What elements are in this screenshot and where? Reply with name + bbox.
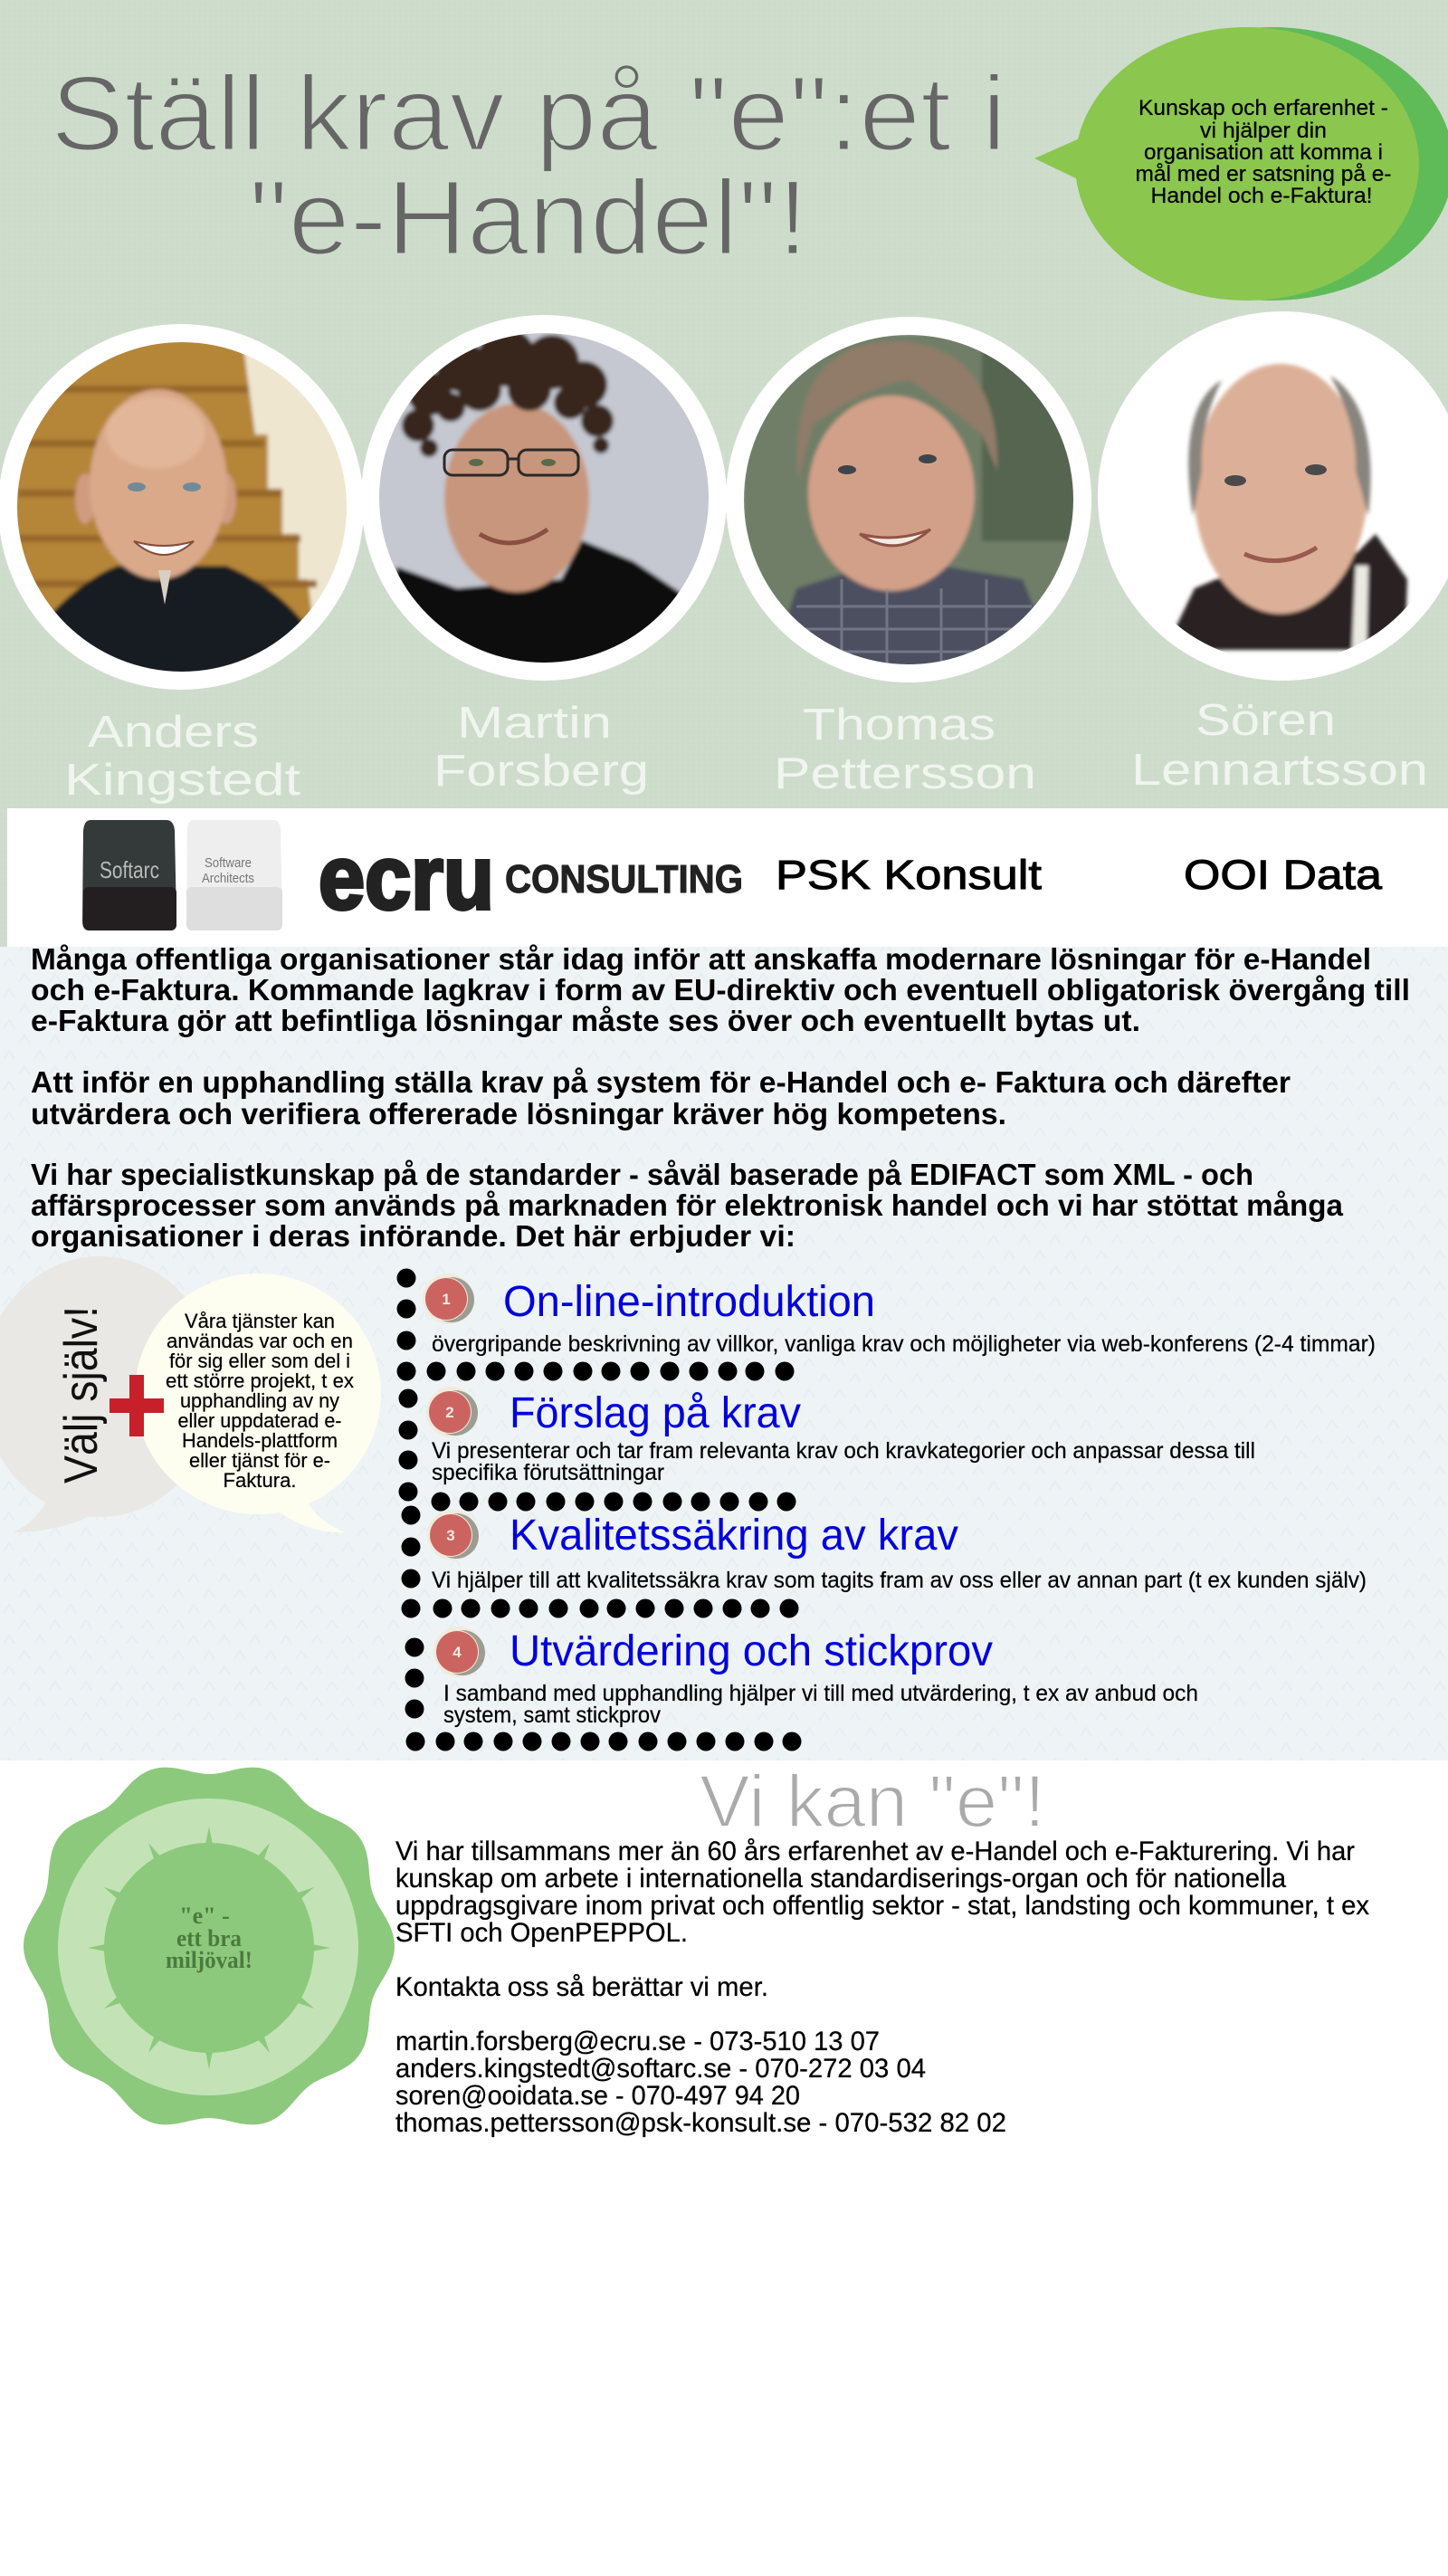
name labels: Thomas	[803, 701, 996, 749]
name labels: Martin	[457, 699, 612, 748]
intro text block: e-Faktura gör att befintliga lösningar måste ses över och eventuellt bytas ut.	[31, 1004, 1140, 1037]
name labels	[64, 696, 1428, 805]
portrait: Anders Kingstedt	[0, 324, 364, 690]
number badge 3: 3	[446, 1527, 455, 1544]
contact list: soren@ooidata.se - 070-497 94 20	[395, 2081, 800, 2111]
speech bubbles: Välj själv	[0, 1256, 381, 1532]
dotted connector lines	[396, 1269, 802, 1751]
heading: Vi kan "e"!: Vi kan "e"!	[700, 1760, 1045, 1843]
contact list: anders.kingstedt@softarc.se - 070-272 03 04	[395, 2054, 926, 2084]
number badge 2: 2	[445, 1404, 454, 1421]
service 1: On-line-introduktion: övergripande beskrivning av villkor, vanliga krav och möjligheter via web-konferens (2-4 timmar)	[432, 1331, 1376, 1357]
logo: OOI Data: OOI Data	[1184, 852, 1383, 898]
bubble text: Handels-plattform	[182, 1429, 338, 1452]
background: pale body section	[0, 947, 1448, 1760]
intro text block	[31, 942, 1410, 1253]
badge text: ett bra	[176, 1925, 242, 1951]
number badge 3	[427, 1510, 479, 1560]
service 4: Utvärdering och stickprov: I samband med upphandling hjälper vi till med utvärdering, t ex av anbud och	[443, 1681, 1198, 1706]
contact list: thomas.pettersson@psk-konsult.se - 070-532 82 02	[395, 2108, 1006, 2138]
number badge 2	[426, 1387, 478, 1437]
intro text block: Många offentliga organisationer står idag inför att anskaffa modernare lösningar för e-Handel	[31, 942, 1371, 976]
text block: experience	[395, 1837, 1369, 2002]
service 3: Kvalitetssäkring av krav: Vi hjälper till att kvalitetssäkra krav som tagits fram av oss eller av annan part (t ex kunden själv)	[432, 1568, 1367, 1593]
intro text block: utvärdera och verifiera offererade lösningar kräver hög kompetens.	[31, 1097, 1006, 1131]
bubble text: Våra tjänster kan	[185, 1310, 335, 1332]
text block: experience: SFTI och OpenPEPPOL.	[395, 1918, 688, 1948]
bubble text: Faktura.	[223, 1469, 297, 1492]
badge text: miljöval!	[166, 1947, 252, 1973]
badge text: "e" -	[179, 1903, 230, 1929]
title: Ställ krav på "e":et i	[51, 54, 1006, 174]
service 2: Förslag på krav: Förslag på krav	[510, 1389, 801, 1437]
background: sage header	[0, 0, 1448, 947]
vertical heading: Välj själv!	[55, 1306, 108, 1484]
intro text block: Att inför en upphandling ställa krav på system för e-Handel och e- Faktura och därefter	[31, 1065, 1291, 1099]
logo: Softarc keys	[82, 820, 282, 930]
speech bubble: intro callout: mål med er satsning på e-	[1135, 162, 1392, 186]
service 2: Förslag på krav: Vi presenterar och tar fram relevanta krav och kravkategorier och anpassar dessa till	[432, 1438, 1255, 1464]
badge text	[166, 1903, 252, 1973]
logo: ecru consulting	[319, 827, 743, 929]
service 4: Utvärdering och stickprov	[433, 1627, 1198, 1728]
speech bubble: intro callout: vi hjälper din	[1200, 119, 1327, 143]
bubble text	[166, 1310, 354, 1492]
portrait: Thomas Pettersson	[726, 317, 1091, 682]
logo: PSK Konsult: PSK Konsult	[776, 852, 1043, 898]
name labels: Anders	[88, 708, 259, 757]
contact list	[395, 2027, 1006, 2138]
bubble text: ett större projekt, t ex	[166, 1369, 354, 1392]
service 2: Förslag på krav	[426, 1387, 1255, 1485]
bubble text: användas var och en	[167, 1330, 353, 1352]
intro text block: affärsprocesser som används på marknaden för elektronisk handel och vi har stöttat många	[31, 1188, 1344, 1222]
logo: Softarc keys: Software	[205, 855, 252, 871]
service 4: Utvärdering och stickprov: Utvärdering och stickprov	[510, 1627, 993, 1675]
number badge 4: 4	[452, 1644, 462, 1661]
bubble text: eller tjänst för e-	[189, 1449, 330, 1472]
logo: ecru consulting: CONSULTING	[505, 857, 743, 902]
logo: Softarc keys: Softarc	[100, 856, 159, 883]
intro text block: organisationer i deras införande. Det här erbjuder vi:	[31, 1219, 795, 1253]
service 3: Kvalitetssäkring av krav: Kvalitetssäkring av krav	[510, 1512, 958, 1560]
speech bubble: intro callout	[1034, 27, 1448, 301]
title: "e-Handel"!	[249, 158, 808, 278]
service 1: On-line-introduktion	[423, 1274, 1376, 1357]
service 4: Utvärdering och stickprov: system, samt stickprov	[443, 1703, 661, 1728]
title	[51, 54, 1006, 278]
number badge 4	[433, 1627, 485, 1677]
name labels: Forsberg	[433, 747, 649, 796]
speech bubble: intro callout: organisation att komma i	[1144, 140, 1383, 165]
text block: experience: kunskap om arbete i internationella standardiserings-organ och för nationella	[395, 1864, 1286, 1894]
service 3: Kvalitetssäkring av krav	[427, 1510, 1367, 1593]
number badge 1: 1	[442, 1291, 451, 1308]
number badge 1	[423, 1274, 474, 1324]
bubble text: eller uppdaterad e-	[177, 1409, 342, 1432]
logo: Softarc keys: Architects	[202, 871, 254, 886]
service 2: Förslag på krav: specifika förutsättningar	[432, 1460, 664, 1485]
bubble text: för sig eller som del i	[169, 1350, 350, 1372]
portrait: Martin Forsberg	[361, 315, 727, 681]
icon: red plus	[110, 1375, 164, 1436]
name labels: Pettersson	[774, 749, 1036, 798]
green seal badge	[24, 1753, 395, 2139]
intro text block: Vi har specialistkunskap på de standarder - såväl baserade på EDIFACT som XML - och	[31, 1158, 1253, 1191]
text block: experience: uppdragsgivare inom privat och offentlig sektor - stat, landsting och kommuner, t ex	[395, 1891, 1369, 1921]
contact list: martin.forsberg@ecru.se - 073-510 13 07	[395, 2027, 880, 2056]
logo: ecru consulting: ecru	[319, 827, 494, 929]
intro text block: och e-Faktura. Kommande lagkrav i form av EU-direktiv och eventuell obligatorisk övergång till	[31, 973, 1410, 1007]
speech bubble: intro callout: Handel och e-Faktura!	[1151, 184, 1372, 208]
text block: experience: Vi har tillsammans mer än 60 års erfarenhet av e-Handel och e-Fakturering. Vi har	[395, 1837, 1355, 1866]
logo strip	[7, 808, 1448, 947]
name labels: Lennartsson	[1131, 746, 1428, 795]
name labels: Kingstedt	[64, 756, 300, 805]
name labels: Sören	[1196, 696, 1336, 745]
service 1: On-line-introduktion: On-line-introduktion	[503, 1278, 875, 1326]
speech bubble: intro callout: Kunskap och erfarenhet -	[1138, 96, 1388, 120]
portrait: Sören Lennartsson	[1098, 311, 1448, 681]
bubble text: upphandling av ny	[180, 1389, 339, 1412]
text block: experience: Kontakta oss så berättar vi mer.	[395, 1972, 768, 2002]
